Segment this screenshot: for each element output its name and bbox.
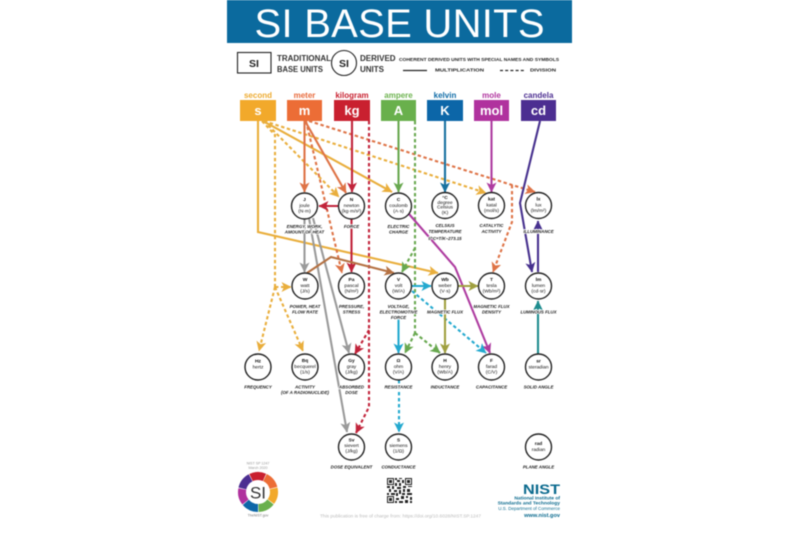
base unit: second: second [244, 91, 272, 100]
unit: degree Celsius [432, 192, 458, 218]
unit: radian: radian [532, 447, 546, 453]
unit: watt: watt [301, 283, 310, 289]
unit: newton: newton [344, 203, 360, 209]
unit: sievert: Sv [349, 438, 355, 444]
arrow: ampere to coulomb [397, 121, 400, 192]
unit labels: INDUCTANCE [431, 384, 460, 390]
arrows: candela to lumen, lumen to lux [520, 121, 540, 272]
NIST logo and address: Standards and Technology [498, 500, 560, 506]
arrows: ampere (dashed division) [402, 121, 440, 353]
unit: joule: J [303, 197, 306, 203]
unit: lumen: (cd·sr) [531, 288, 546, 294]
arrow: watt to volt [307, 257, 394, 273]
unit: lux: lux [535, 202, 542, 208]
legend: MULTIPLICATION [435, 68, 485, 74]
unit: volt [386, 273, 412, 299]
NIST logo and address: NIST [523, 481, 561, 497]
legend: SI [339, 58, 349, 70]
unit: weber: weber [438, 283, 452, 289]
unit: tesla: T [490, 277, 493, 283]
unit labels: CONDUCTANCE [381, 464, 417, 470]
unit: becquerel: becquerel [294, 364, 316, 370]
base unit: mole: mole [482, 91, 501, 100]
unit labels: FORCE [391, 315, 407, 320]
NIST logo and address: www.nist.gov [523, 513, 561, 519]
unit: farad: F [490, 358, 493, 364]
base unit: mole [474, 91, 509, 121]
unit labels: CHARGE [389, 230, 409, 234]
base unit: ampere: ampere [384, 91, 413, 100]
unit: henry [432, 354, 458, 380]
unit labels: RESISTANCE [385, 384, 414, 390]
unit: degree Celsius: (K) [442, 210, 449, 216]
base unit: ampere: A [394, 103, 404, 118]
unit: farad [478, 354, 504, 380]
unit: coulomb: coulomb [389, 203, 408, 209]
unit labels: ABSORBED [338, 384, 365, 390]
unit: katal [478, 192, 504, 218]
title banner: SI BASE UNITS [254, 2, 544, 46]
unit: farad: farad [486, 364, 497, 370]
unit labels: DOSE EQUIVALENT [331, 464, 373, 470]
unit: lumen: lumen [532, 283, 545, 289]
arrow: steradian to lumen [537, 301, 539, 354]
base unit: meter: meter [294, 91, 315, 100]
arrows: joule to watt, gray and sievert [304, 218, 349, 432]
unit: becquerel: (1/s) [300, 370, 310, 376]
arrows: volt to weber and ohm [398, 286, 431, 353]
publication note and SI logo [236, 462, 280, 518]
base unit: kilogram: kilogram [335, 91, 369, 100]
unit: katal: kat [488, 196, 495, 202]
unit: pascal: Pa [349, 277, 355, 283]
unit: steradian [526, 354, 552, 380]
base unit: kelvin: K [440, 103, 450, 118]
base unit: meter: m [299, 103, 310, 118]
unit: farad: (C/V) [486, 370, 498, 376]
base unit: kelvin: kelvin [434, 91, 456, 100]
unit: ohm: ohm [394, 364, 403, 370]
unit: sievert: (J/kg) [345, 448, 358, 454]
arrow: kelvin to degree Celsius [444, 121, 446, 192]
publication note and SI logo: March 2020 [249, 466, 267, 470]
legend: BASE UNITS [277, 65, 324, 74]
unit: degree Celsius: degree [437, 200, 453, 206]
unit labels: PLANE ANGLE [523, 464, 555, 470]
unit: pascal: (N/m²) [345, 288, 359, 294]
unit: radian [526, 434, 552, 460]
unit labels: FREQUENCY [244, 384, 273, 390]
unit labels: FLOW RATE [292, 310, 319, 314]
base unit: kelvin [427, 91, 463, 121]
unit: weber: Wb [441, 277, 449, 283]
unit: gray: Gy [348, 358, 355, 364]
unit: joule: joule [298, 203, 310, 209]
unit: ohm: (V/A) [393, 370, 404, 376]
unit labels: ELECTRIC [388, 224, 410, 229]
unit: lumen [526, 273, 552, 299]
unit labels: POWER, HEAT [290, 304, 321, 309]
unit: gray: (J/kg) [345, 370, 358, 376]
base unit: candela: cd [531, 103, 546, 118]
legend: DERIVED [360, 54, 396, 63]
unit labels [244, 223, 558, 470]
legend [238, 50, 560, 76]
unit: lux: (lm/m²) [531, 208, 547, 214]
unit: katal: katal [486, 202, 497, 208]
unit labels: LUMINOUS FLUX [520, 310, 558, 314]
unit labels: PRESSURE, [339, 304, 364, 309]
unit: sievert: sievert [344, 443, 359, 449]
unit: ohm: Ω [397, 358, 401, 364]
unit: watt: (J/s) [300, 288, 310, 294]
unit: siemens: (1/Ω) [393, 448, 404, 454]
arrows: weber to tesla and henry [445, 286, 478, 353]
base unit: mole: mol [480, 103, 503, 118]
unit labels: AMOUNT OF HEAT [284, 230, 325, 234]
unit: pascal: pascal [344, 283, 359, 289]
unit: sievert [338, 434, 364, 460]
unit labels: ENERGY, WORK, [287, 224, 322, 229]
unit: henry: (Wb/A) [437, 370, 453, 376]
publication note and SI logo: NIST SP 1247 [247, 462, 269, 466]
unit labels: FORCE [344, 224, 360, 229]
unit: siemens: siemens [389, 443, 408, 449]
unit: newton: (kg·m/s²) [342, 208, 362, 214]
unit: volt: volt [395, 283, 403, 289]
QR code [387, 478, 412, 503]
unit labels: DENSITY [482, 310, 502, 314]
unit: steradian: steradian [528, 364, 549, 370]
unit labels: CATALYTIC [480, 223, 504, 228]
unit: joule [292, 193, 318, 219]
unit: coulomb [386, 193, 412, 219]
unit: watt [292, 273, 318, 299]
unit labels: MAGNETIC FLUX [427, 310, 464, 314]
base unit: second [240, 91, 276, 121]
unit labels: STRESS [343, 310, 360, 314]
unit: gray: gray [347, 364, 357, 370]
unit labels: ILLUMINANCE [523, 229, 555, 234]
unit: volt: V [397, 277, 401, 283]
legend: DIVISION [530, 68, 557, 74]
base unit: second: s [254, 103, 262, 118]
arrow: coulomb to farad [409, 214, 490, 353]
base unit: meter [287, 91, 322, 121]
unit: degree Celsius: Celsius [437, 204, 454, 210]
unit: radian: rad [535, 441, 542, 447]
unit: tesla [478, 273, 504, 299]
unit labels: ACTIVITY [294, 384, 316, 390]
unit labels: VOLTAGE, [388, 304, 409, 309]
legend: COHERENT DERIVED UNITS WITH SPECIAL NAMES AND SYMBOLS [399, 57, 560, 63]
unit labels: ELECTROMOTIVE [380, 310, 418, 314]
unit: becquerel [292, 354, 318, 380]
arrows: second (solid multiplication) [258, 121, 438, 273]
unit: volt: (W/A) [392, 288, 405, 294]
unit: henry: henry [439, 364, 452, 370]
unit: gray [338, 354, 364, 380]
unit: henry: H [443, 358, 447, 364]
publication note and SI logo: TheNIST.gov [248, 514, 269, 518]
unit labels: t/°C=T/K−273.15 [428, 236, 462, 241]
unit: hertz: hertz [253, 364, 264, 370]
unit: siemens: S [397, 438, 401, 444]
unit: weber [432, 273, 458, 299]
arrows: meter (dashed division) [306, 121, 535, 273]
unit: newton [338, 193, 364, 219]
base unit: kilogram [334, 91, 370, 121]
unit: ohm [386, 354, 412, 380]
arrow: mole to katal [490, 121, 493, 192]
legend: TRADITIONAL [277, 54, 331, 63]
unit: hertz [245, 354, 271, 380]
NIST logo and address [498, 481, 561, 519]
unit: weber: (V·s) [440, 288, 451, 294]
unit: siemens [386, 434, 412, 460]
arrows: kilogram (dashed division) [355, 121, 369, 433]
unit: coulomb: (A·s) [393, 208, 404, 214]
unit: lux [526, 192, 552, 218]
unit: pascal [338, 273, 364, 299]
NIST logo and address: National Institute of [514, 496, 560, 502]
unit labels: TEMPERATURE [428, 229, 463, 234]
unit: joule: (N·m) [298, 208, 311, 214]
unit: tesla: (Wb/m²) [483, 288, 501, 294]
unit: degree Celsius: °C [442, 195, 448, 201]
base unit: candela [521, 91, 556, 121]
unit: lux: lx [536, 196, 541, 202]
legend: UNITS [360, 65, 385, 74]
unit: steradian: sr [536, 358, 541, 364]
unit: coulomb: C [397, 197, 401, 203]
arrows: kilogram (solid multiplication) [319, 121, 352, 272]
unit labels: SOLID ANGLE [524, 384, 554, 390]
unit labels: CAPACITANCE [476, 384, 508, 390]
unit: newton: N [350, 197, 354, 203]
base unit: ampere [381, 91, 416, 121]
unit labels: CELSIUS [435, 223, 455, 228]
arrows: dashed cyan division [399, 291, 486, 432]
unit: tesla: tesla [486, 283, 497, 289]
unit: lumen: lm [536, 277, 542, 283]
unit labels: MAGNETIC FLUX [473, 304, 511, 309]
unit: katal: (mol/s) [484, 208, 499, 214]
unit: hertz: Hz [255, 358, 262, 364]
unit labels: ACTIVITY [480, 229, 503, 234]
unit labels: DOSE [345, 390, 359, 395]
base unit: candela: candela [524, 91, 554, 100]
arrows: second (dashed division) [259, 121, 486, 351]
availability footnote: This publication is free of charge from: https://doi.org/10.6028/NIST.SP.1247 [320, 514, 481, 518]
unit: watt: W [303, 277, 308, 283]
unit: becquerel: Bq [302, 358, 308, 364]
arrows: meter (solid multiplication) [304, 121, 346, 193]
publication note and SI logo: SI [250, 484, 266, 502]
NIST logo and address: U.S. Department of Commerce [498, 506, 560, 511]
unit labels: (OF A RADIONUCLIDE) [281, 390, 330, 395]
base unit: kilogram: kg [344, 103, 360, 118]
legend: SI [249, 58, 259, 70]
